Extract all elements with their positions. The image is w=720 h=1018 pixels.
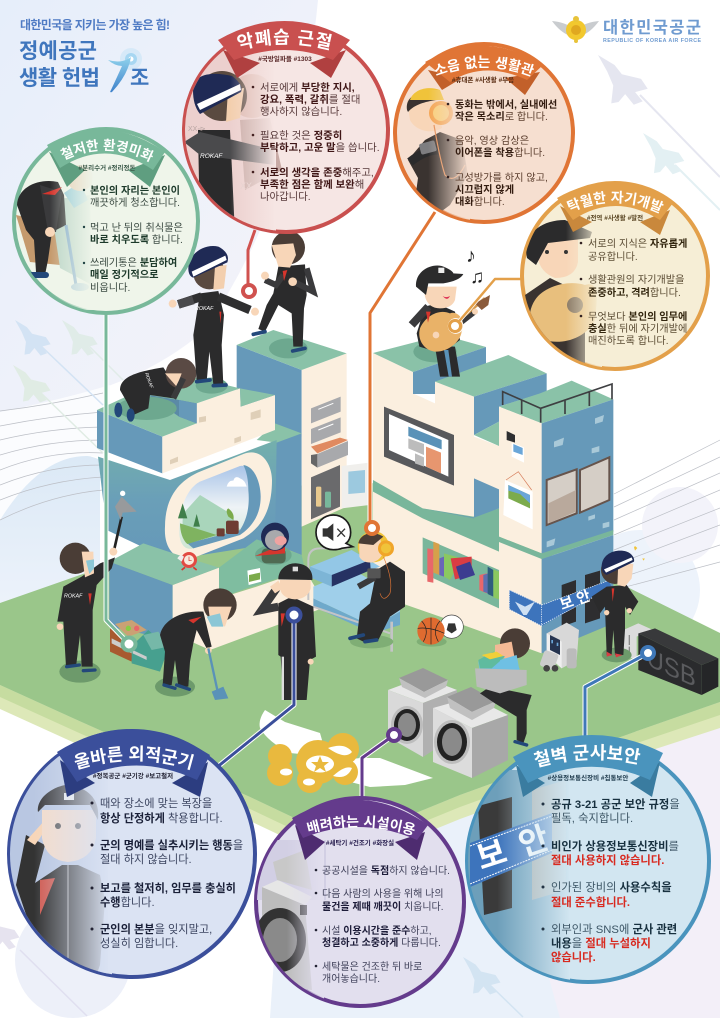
군사보안 text: 외부인과 SNS에 군사 관련	[551, 923, 677, 936]
자기개발 text: 존중하고, 격려합니다.	[588, 286, 681, 299]
security door illustration	[466, 770, 570, 980]
환경미화 text: 본인의 자리는 본인이	[90, 184, 180, 197]
air force logo	[552, 16, 701, 44]
악폐습 text: 서로에게 부당한 지시,	[260, 81, 355, 94]
군사보안 text: 필독, 숙지합니다.	[551, 812, 633, 825]
소음 text: 이어폰을 착용합니다.	[455, 146, 545, 159]
환경미화 text	[83, 184, 183, 294]
person: man with headphones	[350, 531, 405, 648]
외적군기 text: 보고를 철저히, 임무를 충실히	[100, 881, 236, 895]
시설이용 text: 물건을 제때 깨끗이 치웁니다.	[322, 900, 444, 913]
washers	[388, 668, 508, 778]
시설이용 title: 배려하는 시설이용	[306, 815, 415, 835]
소음 hashtags: #휴대폰 #사생활 #무음	[452, 75, 514, 84]
beanie figure illustration: ROKAF	[200, 153, 223, 160]
외적군기 text: 절대 하지 않습니다.	[100, 852, 192, 866]
purple connector	[362, 729, 400, 800]
main title: 정예공군	[19, 40, 97, 63]
panel: 탁월한 자기개발	[520, 181, 710, 371]
외적군기 text: 군의 명예를 실추시키는 행동을	[100, 838, 243, 852]
악폐습 text: 부족한 점은 함께 보완해	[260, 178, 364, 191]
군사보안 title: 철벽 군사보안	[534, 744, 640, 768]
left building	[97, 330, 347, 650]
외적군기 text	[90, 797, 243, 950]
자기개발 text: 매진하도록 합니다.	[588, 334, 669, 347]
person: kneeling cleaner	[114, 358, 196, 422]
시설이용 text: 시설 이용시간을 준수하고,	[322, 924, 432, 937]
자기개발 ribbon	[557, 185, 672, 235]
right building: 보 안	[558, 587, 593, 614]
person: bending man with mask	[155, 588, 237, 700]
drawers and cabinets	[311, 397, 369, 519]
자기개발 text: 서로의 지식은 자유롭게	[588, 237, 687, 250]
자기개발 text: 무엇보다 본인의 임무에	[588, 310, 687, 323]
beanie figure illustration	[185, 49, 282, 230]
자기개발 text: 생활관원의 자기개발을	[588, 273, 685, 286]
군사보안 hashtags: #상용정보통신장비 #칩통보안	[548, 773, 628, 782]
beanie figure illustration: XX	[240, 181, 252, 191]
환경미화 text: 쓰레기통은 분담하여	[90, 256, 177, 269]
자기개발 text	[580, 237, 687, 347]
악폐습 text: 나아갑니다.	[260, 191, 311, 203]
자기개발 text: 충실한 뒤에 자기개발에	[588, 322, 687, 335]
환경미화 hashtags: #분리수거 #정리정돈	[79, 163, 135, 172]
군사보안 text: 비인가 상용정보통신장비를	[551, 839, 679, 853]
군사보안 ribbon	[513, 735, 663, 797]
panel: 소음 없는 생활관	[393, 42, 575, 224]
군사보안 text: 않습니다.	[551, 950, 596, 964]
소음 title: 소음 없는 생활관	[435, 55, 534, 77]
환경미화 text: 비웁니다.	[90, 282, 130, 294]
music notes: ♪	[466, 245, 476, 267]
시설이용 text: 개어놓습니다.	[322, 973, 380, 985]
person: laundry carrier	[475, 628, 532, 745]
person: saluting man	[262, 563, 316, 700]
logo wordmark: 대한민국공군	[603, 18, 701, 37]
시설이용 hashtags: #세탁기 #건조기 #화장실	[326, 838, 394, 847]
headphone figure illustration	[406, 88, 470, 220]
slogan: 대한민국을 지키는 가장 높은 힘!	[20, 17, 170, 32]
person: guitar player	[412, 266, 490, 377]
외적군기 title: 올바른 외적군기	[74, 745, 194, 770]
환경미화 text: 먹고 난 뒤의 취식물은	[90, 222, 183, 234]
소음 text: 대화합니다.	[455, 195, 505, 208]
music notes: ♫	[470, 267, 484, 288]
connector lines	[106, 212, 654, 800]
panel: 철벽 군사보안	[465, 735, 711, 984]
bed	[308, 548, 400, 652]
orange connector	[366, 212, 435, 534]
cleaning figure illustration	[16, 165, 93, 310]
시설이용 text: 공공시설을 독점하지 않습니다.	[322, 864, 450, 877]
blue connector	[585, 647, 654, 750]
green connector	[106, 313, 136, 650]
시설이용 text: 다음 사람의 사용을 위해 나의	[322, 887, 444, 900]
시설이용 text: 세탁물은 건조한 뒤 바로	[322, 961, 422, 973]
red connector	[243, 230, 255, 297]
panel: 환경미화	[12, 127, 200, 315]
clock and helmet toy	[177, 523, 292, 585]
외적군기 text: 성실히 임합니다.	[100, 936, 178, 950]
외적군기 text: 항상 단정하게 착용합니다.	[100, 811, 223, 825]
USB drive: USB	[647, 641, 696, 693]
군사보안 text: 절대 사용하지 않습니다.	[551, 853, 664, 867]
환경미화 text: 매일 정기적으로	[90, 268, 158, 281]
군사보안 text: 인가된 장비의 사용수칙을	[551, 880, 672, 894]
guitar figure illustration	[525, 220, 602, 367]
악폐습 text: 부탁하고, 고운 말을 씁니다.	[260, 141, 380, 154]
robot	[539, 623, 579, 672]
소음 text: 동화는 밖에서, 실내에선	[455, 98, 557, 111]
person: beanie man	[169, 246, 259, 394]
person: mask man cleaning with duster	[57, 491, 137, 683]
외적군기 text: 수행합니다.	[100, 895, 155, 909]
panel: 올바른 외적군기	[7, 729, 257, 979]
navy connector	[216, 608, 300, 768]
악폐습 text: 행사하지 않습니다.	[260, 105, 342, 118]
person: kicking man	[253, 231, 313, 358]
시설이용 ribbon	[292, 800, 428, 860]
악폐습 text: 필요한 것은 정중히	[260, 130, 342, 142]
군사보안 text: 절대 준수합니다.	[551, 895, 630, 909]
자기개발 hashtags: #전역 #사생활 #발전	[587, 213, 643, 222]
USB drive	[623, 623, 718, 695]
악폐습 text: 서로의 생각을 존중해주고,	[260, 166, 374, 179]
gold connector	[450, 279, 523, 332]
소음 text: 시끄럽지 않게	[455, 183, 514, 196]
시설이용 text: 청결하고 소중하게 다룹니다.	[322, 936, 441, 949]
소음 text: 작은 목소리로 합니다.	[455, 110, 548, 123]
환경미화 ribbon	[47, 130, 165, 187]
salute figure illustration	[10, 756, 112, 974]
소음 ribbon	[425, 46, 541, 95]
소음 text: 고성방가를 하지 않고,	[455, 171, 548, 184]
title suffix: 조	[130, 67, 149, 90]
군사보안 text: 공규 3-21 공군 보안 규정을	[551, 798, 680, 811]
악폐습 title: 악폐습 근절	[237, 28, 332, 50]
person: mask man cleaning with duster: ROKAF	[64, 593, 83, 599]
소음 text: 음악, 영상 감상은	[455, 135, 529, 147]
sound off speech bubble	[316, 515, 353, 550]
환경미화 text: 깨끗하게 청소합니다.	[90, 196, 180, 209]
ground	[0, 470, 720, 866]
악폐습 hashtags: #국방일파플 #1303	[258, 54, 312, 63]
right building	[373, 335, 613, 653]
beanie figure illustration: XX◦⊳	[188, 126, 206, 133]
자기개발 text: 공유합니다.	[588, 251, 638, 263]
군사보안 text	[542, 798, 680, 964]
악폐습 text: 강요, 폭력, 갈취를 절대	[260, 93, 360, 106]
emblem	[552, 16, 599, 43]
person: kneeling cleaner: ROKAF	[144, 372, 155, 390]
person: beanie man: ROKAF	[195, 306, 214, 312]
외적군기 hashtags: #정복공군 #군기강 #보고철저	[93, 771, 173, 780]
header title	[19, 17, 170, 92]
자기개발 title: 탁월한 자기개발	[566, 190, 664, 214]
main title line two: 생활 헌법	[19, 67, 100, 90]
boxes and basketball	[110, 615, 463, 672]
외적군기 ribbon	[57, 729, 210, 797]
seven numeral	[108, 48, 142, 92]
washer illustration	[254, 840, 326, 1005]
music notes	[466, 245, 484, 288]
환경미화 title: 철저한 환경미화	[60, 138, 154, 162]
환경미화 text: 바로 치우도록 합니다.	[90, 233, 183, 246]
군사보안 text: 내용을 절대 누설하지	[551, 936, 651, 950]
panel: 악폐습 근절	[182, 21, 390, 234]
person: security guard	[592, 546, 645, 662]
panel: 배려하는 시설이용	[254, 796, 466, 1008]
floor emblem	[260, 710, 433, 793]
외적군기 text: 군인의 본분을 잊지말고,	[100, 922, 212, 936]
소음 text	[447, 98, 557, 208]
security door illustration: 보 안	[472, 819, 556, 877]
외적군기 text: 때와 장소에 맞는 복장을	[100, 797, 212, 810]
악폐습 ribbon	[218, 21, 350, 78]
logo subtitle: REPUBLIC OF KOREA AIR FORCE	[603, 38, 701, 44]
악폐습 text	[252, 81, 380, 203]
시설이용 text	[315, 864, 450, 985]
